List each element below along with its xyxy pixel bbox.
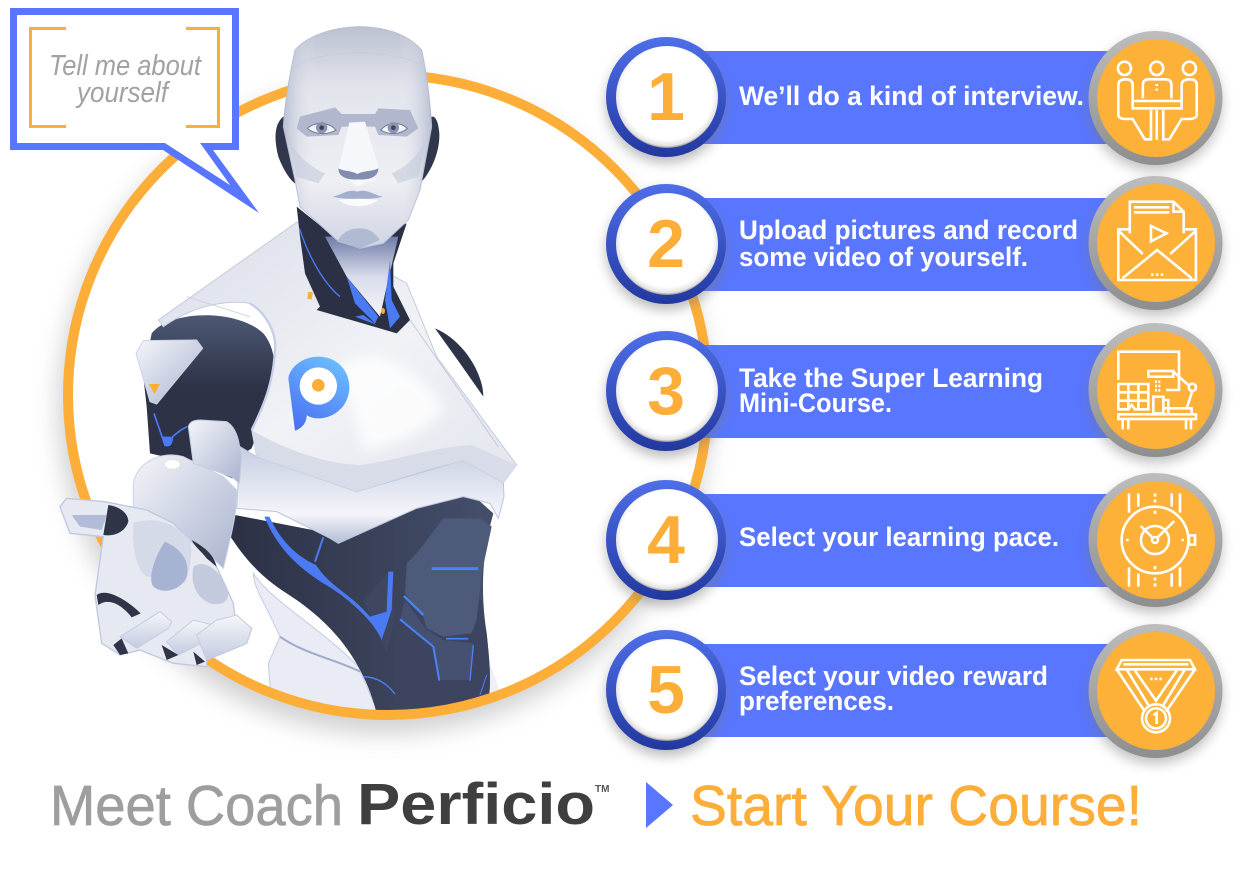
step 2 text bbox=[739, 215, 1078, 272]
step 1 badge: 1 bbox=[647, 59, 685, 135]
step 3 text: Mini-Course. bbox=[739, 388, 892, 418]
robot chest armor bbox=[158, 222, 517, 543]
white disc bbox=[67, 74, 709, 716]
step 2 badge bbox=[606, 184, 726, 310]
icon: envelope with video bbox=[1088, 176, 1222, 316]
robot hand bbox=[60, 498, 252, 667]
step 3 badge: 3 bbox=[647, 353, 685, 429]
step 3 badge bbox=[606, 331, 726, 457]
step 2 bar bbox=[690, 198, 1120, 291]
callout text: Tell me about bbox=[49, 50, 203, 82]
step 5 bar bbox=[690, 644, 1120, 737]
heading: meet coach perficio bbox=[50, 772, 609, 838]
callout text bbox=[49, 50, 203, 109]
step 5 badge: 5 bbox=[647, 652, 685, 728]
heading: meet coach perficio: TM bbox=[595, 784, 609, 795]
step 2 badge: 2 bbox=[647, 206, 685, 282]
step 5 text: preferences. bbox=[739, 686, 894, 716]
step 4 bar bbox=[690, 494, 1120, 587]
step 4 badge bbox=[606, 480, 726, 606]
robot figure bbox=[60, 27, 517, 667]
step 1 badge bbox=[606, 37, 726, 163]
arrow bbox=[646, 782, 673, 828]
callout text: yourself bbox=[75, 77, 171, 109]
icon: wristwatch bbox=[1088, 473, 1222, 613]
step 5 text bbox=[739, 661, 1048, 716]
step 1 bbox=[606, 31, 1222, 171]
icon: medal bbox=[1088, 624, 1222, 764]
step 2 text: some video of yourself. bbox=[739, 242, 1028, 272]
step 1 bar bbox=[690, 51, 1120, 144]
step 2 text: Upload pictures and record bbox=[739, 215, 1078, 245]
callout: tell me about yourself bbox=[10, 8, 259, 213]
step 2 bbox=[606, 176, 1222, 316]
robot lower torso bbox=[231, 497, 499, 710]
step 5 text: Select your video reward bbox=[739, 661, 1048, 691]
robot arm bbox=[60, 340, 252, 667]
robot neck and head bbox=[276, 27, 439, 333]
callout brackets bbox=[30, 28, 218, 126]
heading: meet coach perficio: Perficio bbox=[357, 772, 595, 837]
perficio logo bbox=[288, 357, 349, 431]
icon: study desk bbox=[1088, 323, 1222, 463]
heading: start your course: Start Your Course! bbox=[690, 774, 1142, 838]
robot dark shoulder bbox=[143, 315, 275, 463]
step 5 bbox=[606, 624, 1222, 764]
step 3 bbox=[606, 323, 1222, 463]
step 1 text: We’ll do a kind of interview. bbox=[739, 81, 1084, 111]
circle backdrop shadow bbox=[58, 82, 710, 734]
orange circle ring bbox=[68, 75, 708, 715]
step 4 badge: 4 bbox=[647, 502, 685, 578]
step 5 badge bbox=[606, 630, 726, 756]
step 4 bbox=[606, 473, 1222, 613]
step 3 bar bbox=[690, 345, 1120, 438]
robot right shoulder bbox=[435, 328, 483, 397]
heading: meet coach perficio: Meet Coach bbox=[50, 774, 343, 838]
step 4 text: Select your learning pace. bbox=[739, 522, 1059, 552]
step 3 text: Take the Super Learning bbox=[739, 363, 1043, 393]
step 3 text bbox=[739, 363, 1043, 418]
icon: meeting table bbox=[1088, 31, 1222, 171]
